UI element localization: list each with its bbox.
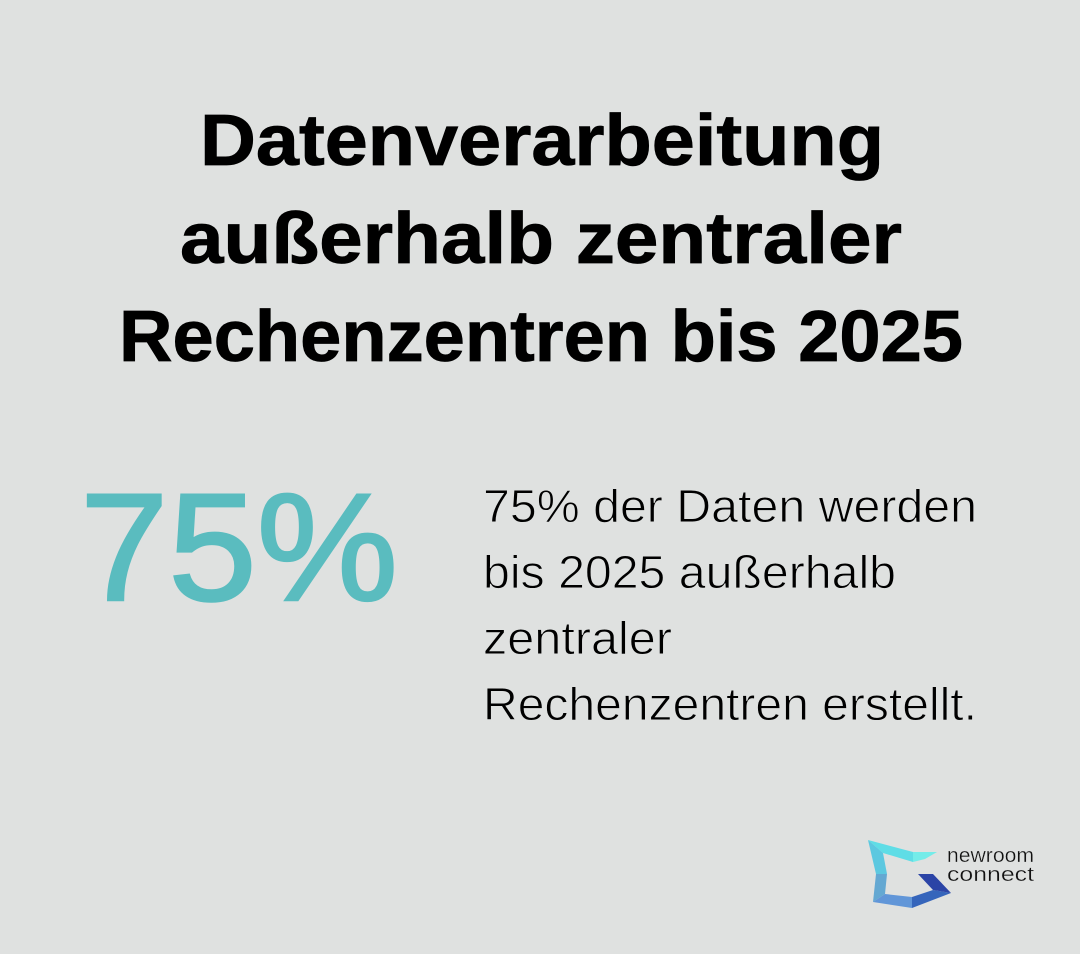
- icon: logo mark: [868, 840, 951, 908]
- big statistic: 75%: 75%: [80, 462, 398, 633]
- title: Rechenzentren bis 2025: [119, 297, 963, 377]
- logo wordmark: newroom: [947, 845, 1034, 867]
- logo wordmark: [947, 845, 1035, 886]
- description text: [483, 480, 977, 730]
- description text: Rechenzentren erstellt.: [483, 678, 977, 730]
- description text: zentraler: [483, 612, 672, 664]
- title: außerhalb zentraler: [180, 199, 902, 279]
- description text: bis 2025 außerhalb: [483, 546, 896, 598]
- description text: 75% der Daten werden: [483, 480, 977, 532]
- logo wordmark: connect: [947, 864, 1035, 886]
- logo: newroom connect: [868, 840, 1035, 908]
- title: Datenverarbeitung: [200, 101, 884, 181]
- title: [119, 101, 963, 377]
